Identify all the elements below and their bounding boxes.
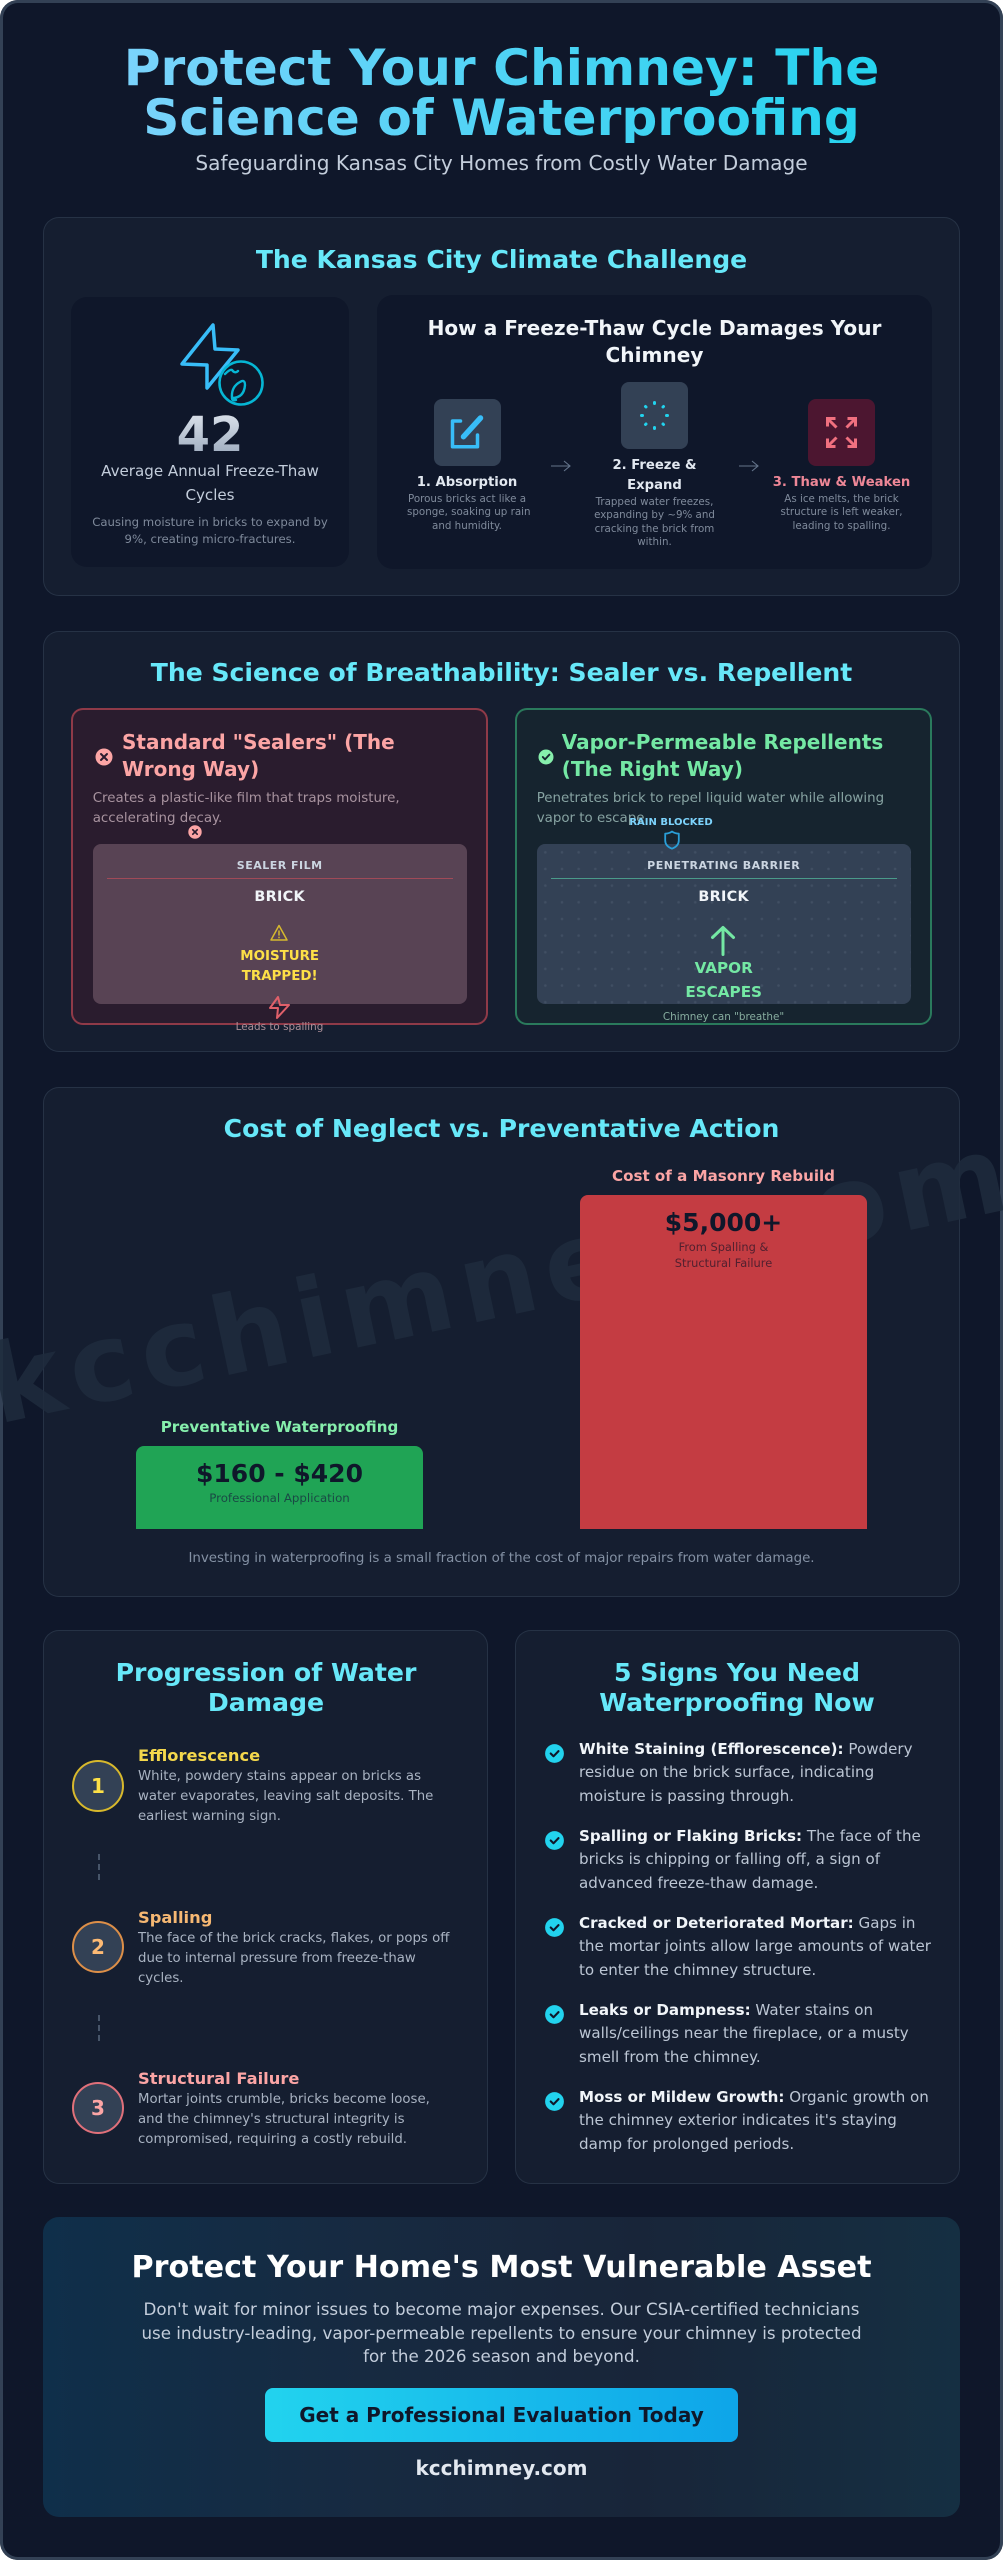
description: absorption: Porous bricks act like a (408, 493, 526, 505)
label: vapor escapes (685, 959, 762, 1001)
card title: sealers: Wrong Way) (122, 757, 259, 781)
heading: progression: Progression of Water (116, 1658, 416, 1687)
text: leaks: Leaks or Dampness: Water stains on (579, 2001, 873, 2019)
label: absorption: 1. Absorption (417, 475, 517, 490)
icon: check mark (538, 750, 554, 764)
value: rebuild: $5,000+ (665, 1208, 782, 1237)
label: rain blocked: RAIN BLOCKED (629, 817, 713, 828)
icon: shield (664, 830, 680, 850)
heading: five signs: 5 Signs You Need (614, 1658, 860, 1687)
label: vapor escapes: ESCAPES (685, 983, 762, 1001)
stat note (92, 514, 328, 546)
text: white staining (579, 1738, 913, 1808)
sign: white staining (544, 1738, 930, 1809)
text: efflorescence: White, powdery stains appear on bricks as (138, 1769, 421, 1784)
heading: freeze-thaw: Chimney (606, 342, 703, 366)
text: structural failure: Mortar joints crumble, bricks become loose, (138, 2092, 430, 2106)
stat note: Causing moisture in bricks to expand by (92, 514, 328, 528)
label: penetrating barrier: PENETRATING BARRIER (647, 859, 800, 872)
text: mortar: to enter the chimney structure. (579, 1961, 816, 1979)
card description: sealers: accelerating decay. (93, 811, 222, 826)
text: moss (579, 2086, 929, 2156)
text: structural failure (138, 2092, 430, 2147)
step 1: absorption (407, 399, 531, 532)
label: sealer film: SEALER FILM (237, 859, 323, 872)
text: moss: Moss or Mildew Growth: Organic growth on (579, 2088, 929, 2106)
step: spalling (72, 1908, 450, 1986)
caption: preventative: Professional Application (209, 1491, 350, 1505)
description: freeze: cracking the brick from (595, 523, 714, 535)
card title: repellents: Vapor-Permeable Repellents (562, 730, 883, 754)
text: leaks: walls/ceilings near the fireplace, or a musty (579, 2024, 909, 2042)
text: spalling: due to internal pressure from freeze-thaw (138, 1951, 416, 1966)
paragraph: call to action: Don't wait for minor issues to become major expenses. Our CSIA-certified technicians (144, 2299, 859, 2319)
title (100, 43, 903, 143)
icon: check (544, 1830, 564, 1850)
text: efflorescence: water evaporates, leaving salt deposits. The (138, 1789, 433, 1804)
heading: freeze-thaw: How a Freeze-Thaw Cycle Damages Your (428, 316, 881, 340)
text: spalling: cycles. (138, 1971, 184, 1986)
button: evaluation: Get a Professional Evaluation Today (299, 2403, 704, 2427)
stat number: 42 (177, 407, 243, 463)
label: freeze (612, 458, 697, 493)
icon: absorption (434, 399, 500, 466)
sign: leaks (544, 1999, 930, 2070)
icon: lightning and moisture (180, 323, 264, 406)
panel: progression of damage (72, 1658, 450, 2147)
panel: climate challenge (92, 245, 910, 548)
text: leaks (579, 1999, 909, 2069)
badge: 1: 1 (91, 1774, 105, 1798)
text: efflorescence: earliest warning sign. (138, 1809, 281, 1824)
badge: 3 (72, 2082, 124, 2134)
card: repellents (515, 708, 932, 1025)
text: efflorescence (138, 1769, 433, 1824)
description: thaw: leading to spalling. (792, 520, 890, 532)
text: moss: the chimney exterior indicates it's staying (579, 2111, 897, 2129)
caption: rebuild (675, 1240, 772, 1270)
caption: rebuild: Structural Failure (675, 1256, 772, 1270)
icon: check (544, 1744, 564, 1762)
diagram: sealer (93, 844, 467, 1004)
description: absorption: and humidity. (432, 520, 502, 532)
description: thaw: structure is left weaker, (781, 506, 902, 518)
stat label: Cycles (185, 486, 235, 504)
icon: thaw (808, 399, 875, 466)
card title: repellents (562, 730, 883, 781)
text: mortar (579, 1912, 931, 1982)
text: mortar: the mortar joints allow large amounts of water (579, 1937, 931, 1955)
text: spalling: Spalling or Flaking Bricks: The face of the (579, 1827, 921, 1845)
stat number (71, 407, 349, 463)
heading: five signs (515, 1658, 959, 1719)
title: Protect Your Chimney: The (124, 38, 879, 97)
label: moisture trapped: TRAPPED! (242, 969, 318, 984)
heading: climate challenge: The Kansas City Climate Challenge (256, 245, 747, 274)
title: spalling: Spalling (138, 1908, 212, 1926)
card description: sealers (93, 791, 400, 826)
badge: 2 (72, 1921, 124, 1973)
text: spalling: The face of the brick cracks, flakes, or pops off (138, 1930, 449, 1946)
stat label: Average Annual Freeze-Thaw (101, 462, 319, 480)
note: breathe: Chimney can "breathe" (663, 1011, 784, 1023)
card title: sealers: Standard "Sealers" (The (122, 730, 395, 754)
label: freeze: 2. Freeze & (612, 458, 697, 473)
description: absorption: sponge, soaking up rain (407, 506, 531, 518)
text: white staining: White Staining (Efflorescence): Powdery (579, 1740, 913, 1758)
title: structural failure: Structural Failure (138, 2068, 299, 2088)
icon: up arrow (710, 926, 736, 956)
badge: 3: 3 (91, 2096, 105, 2120)
heading: progression: Damage (208, 1688, 324, 1717)
card: sealers (71, 708, 488, 1025)
value: preventative: $160 - $420 (196, 1459, 363, 1488)
website: kcchimney.com (416, 2456, 587, 2480)
card description: sealers: Creates a plastic-like film that traps moisture, (93, 791, 400, 806)
description: thaw (781, 493, 902, 532)
note: spalling: Leads to spalling (236, 1021, 323, 1033)
bar: rebuild (580, 1195, 867, 1529)
panel: five signs (515, 1630, 959, 2184)
text: structural failure: and the chimney's structural integrity is (138, 2112, 405, 2127)
bar: preventative (136, 1446, 423, 1529)
arrow: step 2 to 3 (739, 460, 759, 472)
label: brick: BRICK (698, 889, 749, 905)
stat card: 42 freeze-thaw cycles (71, 297, 349, 567)
column: preventative waterproofing (136, 1418, 423, 1529)
description: absorption (407, 493, 531, 532)
text: white staining: residue on the brick surface, indicating (579, 1763, 874, 1781)
panel: cost comparison (136, 1114, 867, 1566)
card description: repellents: vapor to escape. (537, 811, 649, 826)
title: efflorescence: Efflorescence (138, 1746, 260, 1765)
description: freeze: expanding by ~9% and (594, 509, 715, 521)
heading: breathability: The Science of Breathability: Sealer vs. Repellent (151, 658, 852, 687)
stat note: 9%, creating micro-fractures. (125, 532, 295, 546)
sign: moss (544, 2086, 930, 2157)
label: moisture trapped (240, 949, 319, 984)
step 3: thaw and weaken (773, 399, 910, 532)
label: vapor escapes: VAPOR (695, 959, 753, 977)
step: efflorescence (72, 1746, 433, 1824)
column: masonry rebuild (580, 1167, 867, 1529)
text: leaks: smell from the chimney. (579, 2048, 761, 2066)
icon: freeze (621, 382, 688, 449)
icon: check (544, 2092, 564, 2110)
label: thaw: 3. Thaw & Weaken (773, 475, 910, 490)
text: white staining: moisture is passing through. (579, 1787, 794, 1805)
caption: rebuild: From Spalling & (679, 1240, 768, 1254)
badge: 1 (72, 1760, 124, 1812)
stat label (101, 462, 319, 504)
icon: warning (270, 924, 288, 941)
card description: repellents (537, 791, 884, 826)
text: mortar: Cracked or Deteriorated Mortar: Gaps in (579, 1914, 915, 1932)
description: freeze: within. (637, 536, 672, 548)
panel: call to action (43, 2217, 960, 2517)
icon: check (544, 1918, 564, 1936)
heading: five signs: Waterproofing Now (599, 1688, 875, 1717)
description: freeze (594, 496, 715, 548)
note: cost: Investing in waterproofing is a small fraction of the cost of major repairs from water damage. (188, 1551, 815, 1566)
icon: x mark (96, 748, 112, 766)
card description: repellents: Penetrates brick to repel liquid water while allowing (537, 791, 884, 806)
title: Science of Waterproofing (143, 88, 860, 147)
button: evaluation (265, 2388, 738, 2442)
text: moss: damp for prolonged periods. (579, 2135, 794, 2153)
label: moisture trapped: MOISTURE (240, 949, 319, 964)
icon: crack bolt (269, 996, 290, 1019)
sign: spalling (544, 1825, 930, 1896)
card title: sealers (122, 730, 395, 781)
step: structural failure (72, 2068, 430, 2147)
heading: freeze-thaw (428, 316, 882, 366)
text: structural failure: compromised, requiring a costly rebuild. (138, 2132, 407, 2147)
card: freeze-thaw cycle (377, 295, 932, 569)
text: spalling: advanced freeze-thaw damage. (579, 1874, 818, 1892)
description: freeze: Trapped water freezes, (596, 496, 713, 508)
label: brick: BRICK (254, 889, 305, 905)
heading: call to action: Protect Your Home's Most Vulnerable Asset (131, 2250, 872, 2285)
step 2: freeze and expand (594, 382, 715, 548)
heading: progression (116, 1658, 416, 1717)
label: freeze: Expand (627, 478, 682, 493)
icon: small x mark (188, 825, 202, 839)
text: spalling (579, 1825, 921, 1895)
heading: cost: Cost of Neglect vs. Preventative Action (224, 1114, 779, 1143)
sign: mortar (544, 1912, 930, 1983)
bar label: rebuild: Cost of a Masonry Rebuild (612, 1167, 835, 1185)
text: spalling (138, 1930, 450, 1986)
paragraph: call to action: use industry-leading, vapor-permeable repellents to ensure your chimney is protected (141, 2323, 862, 2343)
badge: 2: 2 (91, 1935, 105, 1959)
card title: repellents: (The Right Way) (562, 757, 743, 781)
text: spalling: bricks is chipping or falling off, a sign of (579, 1850, 880, 1868)
diagram: repellent (537, 844, 911, 1004)
subtitle: Safeguarding Kansas City Homes from Costly Water Damage (195, 151, 808, 175)
bar label: preventative: Preventative Waterproofing (161, 1418, 398, 1436)
icon: check (544, 2004, 564, 2024)
description: thaw: As ice melts, the brick (784, 493, 899, 505)
paragraph: call to action (43, 2298, 960, 2369)
panel: breathability (71, 658, 932, 1033)
paragraph: call to action: for the 2026 season and beyond. (363, 2346, 640, 2366)
arrow: step 1 to 2 (551, 460, 571, 472)
